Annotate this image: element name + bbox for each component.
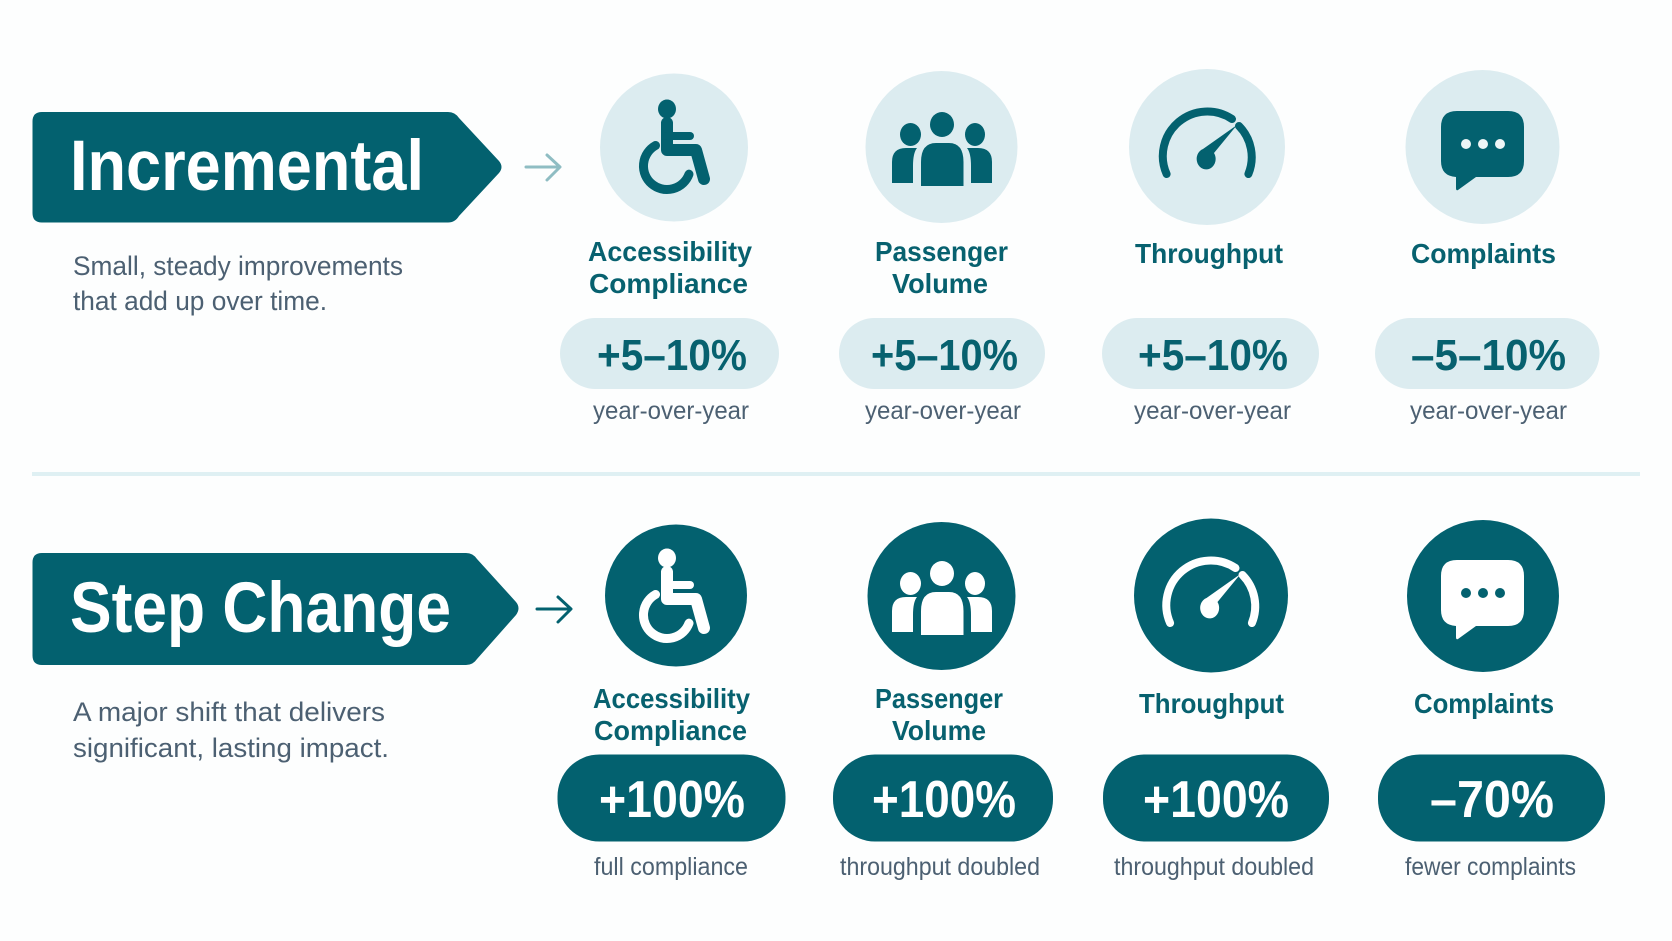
icon: wheelchair	[600, 74, 748, 222]
description: Step Change: A major shift that delivers	[73, 697, 385, 727]
label: Complaints: Complaints	[1411, 238, 1556, 269]
arrow: Step Change	[537, 597, 571, 622]
value pill: +5–10%	[1102, 318, 1319, 389]
value pill: +100%: +100%	[872, 771, 1016, 829]
caption: throughput doubled	[840, 853, 1040, 881]
label: Passenger Volume: Volume	[892, 268, 988, 299]
metric: Complaints	[1375, 70, 1600, 425]
icon: gauge	[1129, 69, 1285, 225]
label: Passenger Volume: Passenger	[875, 683, 1003, 714]
value pill: +5–10%: +5–10%	[871, 331, 1018, 380]
icon: people	[866, 71, 1018, 223]
description: Incremental: Small, steady improvements	[73, 251, 403, 281]
value pill: +100%	[833, 754, 1053, 842]
section: Incremental	[32, 69, 1600, 425]
label: Accessibility Compliance	[588, 236, 752, 299]
icon: chat bubble	[1407, 520, 1559, 672]
label: Passenger Volume	[875, 683, 1003, 746]
banner: Incremental	[32, 112, 502, 222]
label: Accessibility Compliance: Compliance	[594, 715, 747, 746]
label: Passenger Volume: Volume	[892, 715, 986, 746]
caption: throughput doubled	[1114, 853, 1314, 881]
label: Passenger Volume	[875, 236, 1008, 299]
value pill: −70%: –70%	[1430, 771, 1554, 829]
value pill: +100%: +100%	[1143, 771, 1289, 829]
caption: full compliance	[594, 853, 748, 881]
description: Step Change	[73, 697, 389, 763]
label: Accessibility Compliance	[593, 683, 750, 746]
metric: Accessibility Compliance	[560, 74, 779, 425]
metric: Passenger Volume	[839, 71, 1045, 425]
value pill: +5–10%: +5–10%	[1138, 331, 1288, 380]
label: Complaints: Complaints	[1414, 688, 1554, 719]
caption: fewer complaints	[1405, 853, 1576, 881]
icon: wheelchair	[605, 524, 747, 666]
label: Passenger Volume: Passenger	[875, 236, 1008, 267]
value pill: +100%: +100%	[599, 771, 745, 829]
banner: Step Change: Step Change	[70, 569, 451, 648]
banner: Step Change	[32, 553, 518, 665]
icon: people	[868, 522, 1016, 670]
metric: Throughput	[1103, 518, 1329, 881]
label: Accessibility Compliance: Accessibility	[588, 236, 752, 267]
description: Incremental: that add up over time.	[73, 286, 327, 316]
description: Incremental	[73, 251, 403, 316]
value pill: +100%	[558, 754, 786, 842]
section: Step Change	[32, 518, 1605, 881]
caption: year-over-year	[1410, 397, 1567, 425]
icon: gauge	[1134, 518, 1288, 672]
caption: year-over-year	[865, 397, 1021, 425]
value pill: −5–10%: –5–10%	[1411, 331, 1566, 380]
label: Throughput: Throughput	[1139, 688, 1284, 719]
label: Accessibility Compliance: Accessibility	[593, 683, 750, 714]
metric: Passenger Volume	[833, 522, 1053, 881]
label: Throughput: Throughput	[1135, 238, 1283, 269]
metric: Throughput	[1102, 69, 1319, 425]
value pill: +5–10%	[839, 318, 1045, 389]
value pill: −70%	[1378, 754, 1605, 842]
banner: Incremental: Incremental	[70, 127, 424, 206]
metric: Accessibility Compliance	[558, 524, 786, 881]
value pill: +100%	[1103, 754, 1329, 842]
caption: year-over-year	[1134, 397, 1291, 425]
icon: chat bubble	[1406, 70, 1560, 224]
metric: Complaints	[1378, 520, 1605, 881]
value pill: −5–10%	[1375, 318, 1600, 389]
caption: year-over-year	[593, 397, 749, 425]
description: Step Change: significant, lasting impact.	[73, 733, 389, 763]
value pill: +5–10%	[560, 318, 779, 389]
arrow: Incremental	[526, 155, 560, 180]
label: Accessibility Compliance: Compliance	[589, 268, 748, 299]
value pill: +5–10%: +5–10%	[597, 331, 747, 380]
